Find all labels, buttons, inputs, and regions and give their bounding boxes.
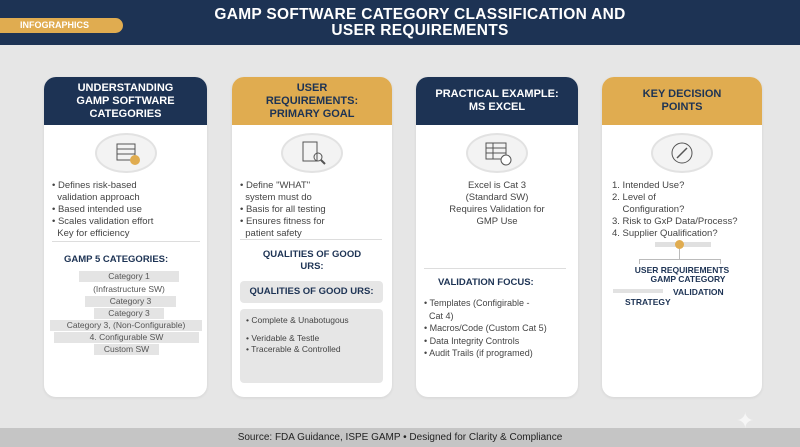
bullets: • Based intended use bbox=[52, 204, 142, 215]
heading: PRACTICAL EXAMPLE: bbox=[435, 88, 559, 100]
box: qualities heading: QUALITIES OF GOOD URS: bbox=[249, 286, 374, 297]
badge: infographics: INFOGRAPHICS bbox=[20, 20, 89, 30]
diagram: decision tree: USER REQUIREMENTS bbox=[635, 265, 729, 275]
heading: GAMP SOFTWARE bbox=[76, 94, 175, 106]
heading: UNDERSTANDING bbox=[78, 82, 173, 94]
numbered list: 2. Level of bbox=[612, 192, 656, 203]
panel: MS Excel bbox=[416, 77, 578, 397]
bullets: • Define "WHAT" bbox=[240, 180, 310, 191]
box: qualities heading bbox=[240, 281, 383, 303]
panel: understanding GAMP bbox=[44, 77, 207, 397]
icon: spreadsheet bbox=[466, 133, 528, 173]
panel: user requirements bbox=[232, 77, 392, 397]
footer bbox=[0, 428, 800, 447]
bullets: • Scales validation effort bbox=[52, 216, 153, 227]
bullets: validation approach bbox=[57, 192, 140, 203]
bullets: • Basis for all testing bbox=[240, 204, 326, 215]
subheading: VALIDATION FOCUS: bbox=[438, 277, 534, 288]
heading: REQUIREMENTS: bbox=[266, 94, 358, 106]
bullets: Cat 4) bbox=[429, 310, 454, 320]
bullets: • Ensures fitness for bbox=[240, 216, 325, 227]
bullets bbox=[52, 180, 154, 239]
icon: sparkle: ✦ bbox=[736, 408, 754, 433]
heading: KEY DECISION bbox=[643, 88, 721, 100]
panel: understanding GAMP: Category 3, (Non-Configurable) bbox=[67, 320, 185, 330]
diagram: decision tree bbox=[613, 240, 729, 307]
bullets: • Audit Trails (if programed) bbox=[424, 348, 533, 358]
heading: CATEGORIES bbox=[90, 108, 161, 120]
arrow bbox=[613, 289, 663, 293]
title bbox=[214, 6, 626, 39]
diagram: decision tree: STRATEGY bbox=[625, 297, 671, 307]
subheading bbox=[263, 249, 361, 272]
bullets: • Macros/Code (Custom Cat 5) bbox=[424, 323, 547, 333]
bullets bbox=[424, 298, 547, 358]
numbered list: 3. Risk to GxP Data/Process? bbox=[612, 216, 738, 227]
panel: understanding GAMP: Category 1 bbox=[108, 271, 150, 281]
subheading: QUALITIES OF GOOD bbox=[263, 249, 361, 260]
heading bbox=[602, 77, 762, 125]
box: qualities list bbox=[240, 309, 383, 383]
heading: MS EXCEL bbox=[469, 101, 525, 113]
diagram: decision tree: GAMP CATEGORY bbox=[651, 274, 725, 284]
text: Requires Validation for bbox=[449, 204, 545, 215]
box: qualities list: • Tracerable & Controlled bbox=[246, 344, 341, 354]
bullets: • Data Integrity Controls bbox=[424, 336, 519, 346]
heading: USER bbox=[297, 82, 327, 94]
panel: understanding GAMP: Custom SW bbox=[104, 344, 149, 354]
heading: POINTS bbox=[662, 101, 702, 113]
text bbox=[449, 180, 545, 227]
text: GMP Use bbox=[476, 216, 518, 227]
numbered list: 1. Intended Use? bbox=[612, 180, 684, 191]
numbered list bbox=[612, 180, 738, 239]
bullets bbox=[240, 180, 326, 239]
bullets: • Defines risk-based bbox=[52, 180, 137, 191]
box: qualities list: • Veridable & Testle bbox=[246, 333, 319, 343]
icon: chip bbox=[94, 133, 156, 173]
icon: document search bbox=[281, 133, 343, 173]
numbered list: Configuration? bbox=[623, 204, 684, 215]
heading: PRIMARY GOAL bbox=[270, 108, 354, 120]
panel: understanding GAMP: Category 3 bbox=[108, 308, 150, 318]
heading bbox=[44, 77, 207, 125]
bullets: Key for efficiency bbox=[57, 228, 129, 239]
heading bbox=[232, 77, 392, 125]
title: GAMP SOFTWARE CATEGORY CLASSIFICATION AND bbox=[214, 6, 626, 23]
panel: key decision points bbox=[602, 77, 762, 397]
badge: infographics bbox=[0, 18, 123, 33]
heading bbox=[416, 77, 578, 125]
subheading: GAMP 5 CATEGORIES: bbox=[64, 254, 168, 265]
title: USER REQUIREMENTS bbox=[331, 22, 509, 39]
diagram: decision tree: VALIDATION bbox=[673, 287, 724, 297]
text: Excel is Cat 3 bbox=[468, 180, 526, 191]
bullets: patient safety bbox=[245, 228, 302, 239]
box: qualities list: • Complete & Unabotugous bbox=[246, 315, 349, 325]
bullets: • Templates (Configirable - bbox=[424, 298, 530, 308]
numbered list: 4. Supplier Qualification? bbox=[612, 228, 718, 239]
categories list bbox=[50, 271, 202, 355]
subheading: URS: bbox=[300, 261, 324, 272]
bullets: system must do bbox=[245, 192, 312, 203]
header bar bbox=[0, 0, 800, 45]
text: (Standard SW) bbox=[466, 192, 528, 203]
icon: compass bbox=[651, 133, 713, 173]
panel: understanding GAMP: Category 3 bbox=[110, 296, 151, 306]
panel: understanding GAMP: 4. Configurable SW bbox=[90, 332, 163, 342]
footer: Source: FDA Guidance, ISPE GAMP • Designed for Clarity & Compliance bbox=[238, 432, 562, 443]
panel: understanding GAMP: (Infrastructure SW) bbox=[93, 284, 165, 294]
